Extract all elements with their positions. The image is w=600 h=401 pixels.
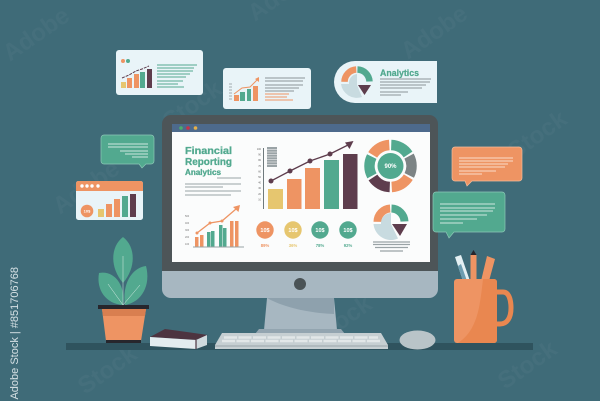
pens and mug: [454, 250, 511, 343]
screen heading: [185, 145, 232, 177]
ring chart 90%: 90%: [384, 164, 397, 170]
screen: [172, 131, 430, 262]
card: bar chart with text: [116, 50, 203, 95]
metric circles: 78%: [316, 243, 324, 248]
main bar chart: 60: [258, 170, 262, 173]
watermark: Adobe: [396, 0, 473, 65]
screen heading: Reporting: [185, 157, 232, 168]
main bar chart: 100: [257, 148, 262, 151]
watermark: Stock: [503, 105, 573, 165]
speech bubble: green right: [433, 192, 505, 238]
metric circles: 36%: [289, 243, 297, 248]
main bar chart: 10: [258, 198, 262, 201]
screen heading: Financial: [185, 145, 232, 157]
stock id: Adobe Stock | #851706768: [9, 267, 21, 400]
speech bubble: orange: [452, 147, 522, 186]
metric circles: 10$: [288, 228, 298, 234]
watermark: Stock: [493, 335, 563, 395]
ring chart 90%: [362, 137, 419, 195]
speech bubble: green left: [101, 135, 154, 168]
metric circles: 92%: [344, 243, 352, 248]
small pie chart: [373, 208, 410, 251]
pens: [455, 255, 470, 281]
heading: analytics: Analytics: [380, 68, 419, 78]
mug handle: [497, 292, 511, 324]
small bar chart: 100: [185, 243, 190, 246]
watermark: Adobe: [48, 155, 125, 220]
mug body: [454, 279, 497, 343]
window card with bars: [76, 181, 143, 220]
main bar chart: 70: [258, 165, 262, 168]
monitor stand: [255, 298, 345, 334]
window card with bars: 10$: [84, 208, 91, 214]
leaves: [113, 237, 133, 283]
screen heading: Analytics: [185, 168, 222, 177]
metric circles: 89%: [261, 243, 269, 248]
small bar chart: 400: [185, 222, 190, 225]
main bar chart: 90: [258, 154, 262, 157]
watermark: Adobe: [0, 2, 75, 67]
main bar chart: 20: [258, 193, 262, 196]
keyboard: [215, 333, 388, 349]
main bar chart: 30: [258, 187, 262, 190]
desk: [66, 343, 533, 350]
metric circles: 10$: [260, 228, 270, 234]
watermark: Stock: [308, 290, 378, 350]
monitor: [162, 115, 438, 298]
card: line chart with text: [223, 68, 311, 109]
main bar chart: 50: [258, 176, 262, 179]
watermark: Stock: [73, 340, 143, 400]
small bar chart: 300: [185, 229, 190, 232]
small bar chart: 200: [185, 236, 190, 239]
metric circles: 10$: [343, 228, 353, 234]
screen text lines: [185, 178, 241, 195]
main bar chart: 40: [258, 182, 262, 185]
main bar chart: 80: [258, 159, 262, 162]
browser title bar: [172, 124, 430, 132]
metric circles: [256, 221, 357, 248]
plant: [98, 237, 149, 343]
small bar chart: 500: [185, 215, 190, 218]
camera button: [294, 278, 306, 290]
main bar chart: [257, 141, 358, 209]
book: [150, 329, 208, 349]
mouse: [400, 330, 436, 350]
pot: [102, 309, 146, 341]
metric circles: 10$: [315, 228, 325, 234]
watermark: Stock: [158, 75, 228, 135]
card: analytics: [334, 61, 437, 103]
small bar chart: [185, 205, 244, 247]
